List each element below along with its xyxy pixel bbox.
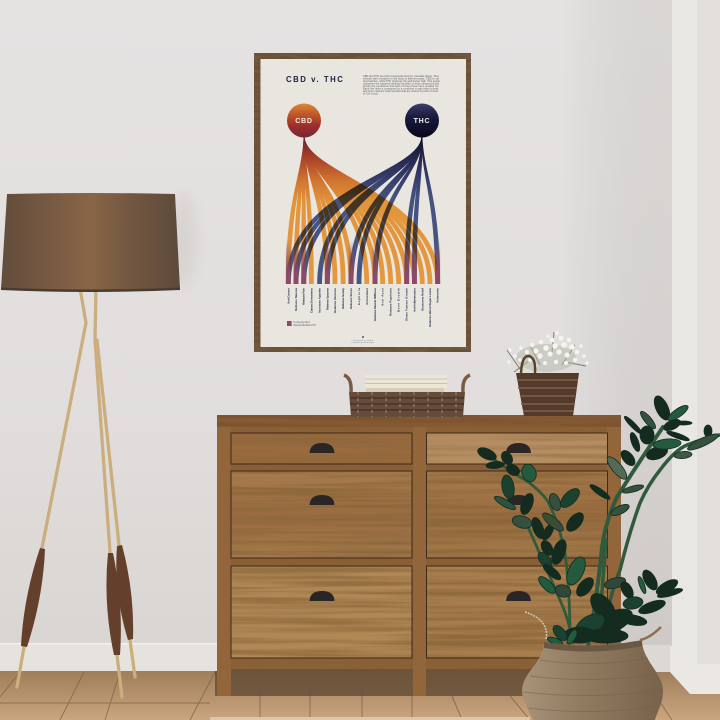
CBD node: [287, 104, 321, 138]
condition labels: Relieves Nausea: [294, 288, 298, 311]
condition labels: Reduces Seizures: [333, 288, 337, 313]
poster title: CBD v. THC: [286, 75, 344, 84]
condition labels: Reduces Pain: [302, 288, 306, 305]
condition labels: Bone Growth: [397, 288, 401, 312]
floor: [0, 667, 720, 720]
lamp shade: [1, 193, 180, 291]
drawer bottom right: [426, 566, 608, 658]
condition labels: Euphoria: [357, 288, 361, 305]
condition labels: Reduces Anxiety: [341, 288, 345, 309]
poster footer mark: Designed in studio: [353, 339, 374, 342]
flower basket: [507, 331, 589, 416]
intro text block: interact with receptors in the body in different ways. CBD is not: [363, 78, 439, 80]
drawer middle left: [231, 471, 412, 558]
plant stems: [487, 427, 720, 647]
condition labels: Reduces Psychosis: [389, 288, 393, 316]
condition labels: Antioxidant: [365, 288, 369, 305]
condition labels: Relieves Stress: [349, 288, 353, 309]
drawer top right: [426, 433, 608, 464]
condition labels: Anti-Acne: [381, 288, 385, 306]
wooden dresser: [217, 415, 621, 696]
poster frame: [254, 53, 471, 352]
THC node: [405, 104, 439, 138]
condition labels: Slows Tumour Growth: [405, 288, 409, 321]
condition labels: Anti-Inflammatory: [412, 288, 416, 312]
baseboard: [0, 643, 720, 694]
books: [365, 375, 447, 394]
condition labels: Relieves Spasms: [325, 288, 329, 310]
plant leaves: [476, 394, 720, 647]
lamp leg wraps: [21, 545, 133, 655]
drawer top left: [231, 433, 412, 464]
floor lamp: [1, 192, 197, 697]
lamp legs: [17, 288, 135, 697]
legend: Shared by both CBD and THC: [293, 324, 316, 327]
intro text block: compares the reported medical benefits of each compound and: [363, 82, 440, 86]
legend: Overlapping Effect: [293, 321, 310, 324]
condition labels: Reduces Muscle Stiffness: [373, 288, 377, 321]
intro text block: [363, 75, 440, 96]
dresser body: [217, 427, 621, 696]
dresser top: [217, 415, 621, 427]
condition labels: Antiemetic: [436, 288, 440, 303]
intro text block: shows the conditions that both of them have been studied for.: [363, 85, 439, 88]
wicker tray basket: [344, 375, 470, 417]
intro text block: CBD and THC are both compounds found in cannabis plants. They: [363, 75, 440, 78]
CBD node: CBD: [295, 118, 313, 125]
lamp shadow: [169, 192, 197, 288]
intro text block: Each line links a compound to a condition it may help to treat,: [363, 88, 439, 90]
intro text block: of the plant.: [363, 92, 379, 96]
drawer middle right: [426, 471, 608, 558]
woven belly basket: [522, 612, 663, 720]
condition labels: Causes Drowsiness: [309, 288, 313, 313]
shared benefit column bases: [286, 240, 440, 284]
condition labels: Anti-Cancer: [286, 287, 290, 304]
poster footer mark: [352, 336, 375, 344]
white flowers: [507, 331, 589, 372]
framed poster: [254, 53, 471, 352]
intro text block: psychoactive, while THC produces the well known high. This poster: [363, 80, 440, 83]
potted plant: [476, 394, 720, 720]
poster paper: [260, 59, 466, 347]
poster footer mark: Printed on archival paper: [352, 341, 375, 344]
condition labels: [286, 287, 440, 327]
THC node: THC: [414, 118, 430, 125]
condition labels: Reduces Blood Sugar Levels: [428, 288, 432, 327]
CBD fan of curves: [286, 136, 440, 284]
THC fan of curves: [286, 136, 440, 284]
condition labels: Increases Appetite: [318, 288, 322, 313]
drawer handles: [310, 443, 531, 601]
legend: [287, 321, 316, 327]
drawer bottom left: [231, 566, 412, 658]
condition labels: Glaucoma Relief: [420, 288, 424, 311]
intro text block: and plum columns mark benefits that are shared by both of them.: [363, 90, 439, 93]
